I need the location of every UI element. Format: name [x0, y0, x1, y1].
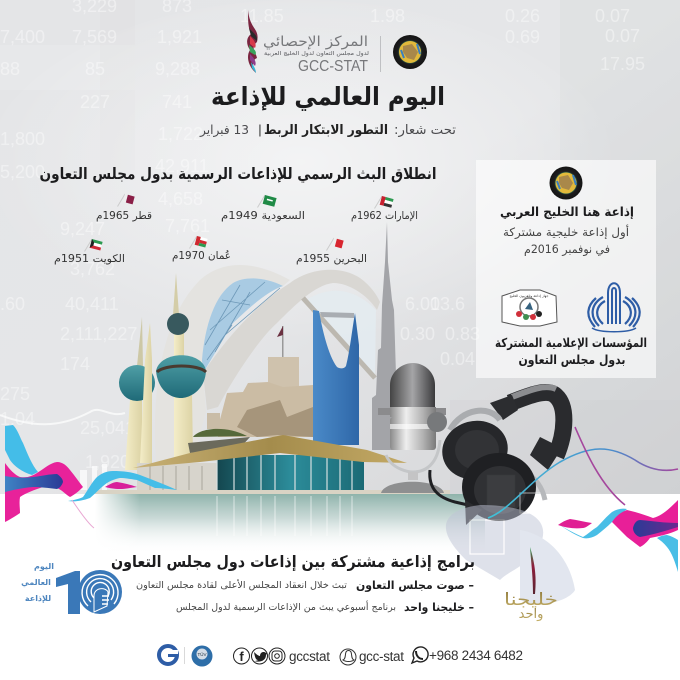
icon: UAE flag [375, 195, 394, 213]
background: market data screen: 0.69 [505, 27, 540, 47]
background: market data screen: 13.6 [430, 294, 465, 314]
icon: Kuwait flag [85, 238, 103, 255]
background: market data screen: 3,762 [70, 259, 115, 279]
icon: Twitter [252, 648, 268, 664]
logo: Our Gulf is one calligraphy [504, 547, 558, 622]
ribbon: left wave [5, 425, 177, 528]
background: market data screen: 0.07 [605, 26, 640, 46]
programme: Our Gulf is one [176, 600, 474, 615]
logo: Our Gulf is one calligraphy: واحد [519, 607, 543, 622]
text: GCC-STAT: GCC-STAT [298, 58, 368, 75]
footer: logos and contact [159, 646, 523, 666]
background: market data screen: 0.04 [440, 349, 475, 369]
heading: joint programmes: برامج إذاعية مشتركة بين إذاعات دول مجلس التعاون [111, 552, 475, 571]
icon: Oman flag [190, 235, 208, 252]
logo: Gulf joint media production [588, 283, 640, 332]
headphones reflection [446, 493, 575, 604]
background: market data screen: 88 [0, 59, 20, 79]
subtitle: slogan and date: ‏تحت شعار:‏ [394, 123, 456, 138]
icon: Bahrain flag [327, 237, 344, 254]
Omani fort [193, 357, 313, 437]
icon: Facebook [234, 648, 250, 664]
icon: Snapchat [340, 649, 356, 665]
icon: Facebook: f [239, 649, 244, 664]
background: market data screen: 5,200 [0, 162, 45, 182]
pavilion building [95, 435, 450, 495]
icon: GCC emblem [550, 166, 582, 200]
background: market data screen: 0.26 [505, 6, 540, 26]
background: market data screen: 1,04 [0, 409, 35, 429]
background: market data screen: 17.95 [600, 54, 645, 74]
background: market data screen [0, 0, 680, 494]
text: of GCC countries: بدول مجلس التعاون [518, 352, 626, 367]
background: market data screen: 0.83 [445, 324, 480, 344]
subtitle: slogan and date: التطور الابتكار الربط [264, 123, 388, 138]
label: Qatar 1965 [96, 193, 152, 222]
icon: GCC emblem [393, 35, 427, 69]
icon: WhatsApp [412, 647, 428, 663]
label: Qatar 1965: قطر 1965م [96, 210, 152, 222]
microphone [378, 363, 447, 493]
heading: launch of official radio broadcast: انطلاق البث الرسمي للإذاعات الرسمية بدول مجلس التعاون [40, 165, 436, 184]
logo: Gulf radio and TV authority: جهاز إذاعة وتلفزيون الخليج [510, 294, 548, 299]
programme: Voice of the GCC [136, 578, 474, 593]
Kingdom Centre [313, 310, 359, 445]
background: market data screen: .60 [0, 294, 25, 314]
illustration: landmarks [95, 222, 575, 604]
background: market data screen: 0.07 [595, 6, 630, 26]
text: first joint radio: أول إذاعة خليجية مشتركة [503, 224, 629, 240]
background: market data screen: 275 [0, 384, 30, 404]
background: market data screen: 227 [80, 92, 110, 112]
programme: Voice of the GCC: ‏– صوت مجلس التعاون [356, 578, 474, 593]
text: joint media institutions: المؤسسات الإعلامية المشتركة [495, 335, 647, 350]
arches [155, 265, 380, 470]
icon: TUV badge [192, 646, 212, 666]
programme: Our Gulf is one: ‏– خليجنا واحد [404, 600, 474, 615]
subtitle: slogan and date: ‏13 فبراير [199, 122, 249, 138]
background: market data screen: 0.30 [400, 324, 435, 344]
text: gcc-stat: gcc-stat [359, 649, 404, 664]
programme: Our Gulf is one: برنامج أسبوعي يبث من الإذاعات الرسمية لدول المجلس [176, 600, 396, 613]
background: market data screen: 1,800 [0, 129, 45, 149]
background: market data screen: 9,247 [60, 219, 105, 239]
label: UAE 1962: الإمارات 1962م [351, 210, 418, 222]
programme: Voice of the GCC: تبث خلال انعقاد المجلس الأعلى لقادة مجلس التعاون [136, 579, 347, 591]
logo: World Radio Day 10: العالمي [21, 578, 51, 587]
panel: Gulf radio and joint institutions [476, 160, 656, 378]
logo: World Radio Day 10: للإذاعة [25, 594, 51, 603]
background: market data screen: 1.98 [370, 6, 405, 26]
wave lines [488, 427, 678, 518]
logo: World Radio Day 10: اليوم [34, 562, 54, 571]
icon: TUV badge: TÜV [198, 651, 206, 657]
text: centre name: المركز الإحصائي [263, 34, 368, 50]
background: market data screen: 4,658 [158, 189, 203, 209]
text: centre subtitle: لدول مجلس التعاون لدول الخليج العربية [264, 51, 369, 57]
background: market data screen: 6.00 [405, 294, 440, 314]
text: gccstat: gccstat [289, 649, 330, 664]
subtitle: slogan and date [199, 122, 456, 138]
background: market data screen: 1,921 [157, 27, 202, 47]
background: market data screen: 1,722 [158, 124, 203, 144]
label: Kuwait 1951 [54, 238, 125, 265]
icon: Instagram [269, 648, 285, 664]
flagpole and fort flag [277, 326, 284, 362]
background: market data screen: 25,041 [80, 418, 135, 438]
label: Kuwait 1951: الكويت 1951م [54, 253, 125, 265]
background: market data screen: 42,911 [155, 156, 209, 176]
label: Oman 1970 [172, 235, 231, 262]
icon: Ministry badge [159, 646, 178, 664]
label: Saudi Arabia 1949: السعودية 1949م [221, 210, 305, 222]
label: Bahrain 1955 [296, 237, 367, 265]
label: Saudi Arabia 1949 [221, 194, 305, 222]
text: Hona Al-Khaleej radio: إذاعة هنا الخليج العربي [500, 204, 634, 219]
background: market data screen: 1,920 [85, 452, 130, 472]
Burj Khalifa [372, 222, 396, 450]
label: Oman 1970: عُمان 1970م [172, 250, 231, 262]
icon: Saudi flag [258, 194, 277, 212]
icon: Qatar flag [118, 193, 135, 210]
water reflection [95, 494, 485, 554]
background: market data screen: 7,761 [165, 216, 210, 236]
background: market data screen: 741 [162, 92, 192, 112]
logo: GCC-STAT [247, 10, 427, 75]
logo: Our Gulf is one calligraphy: خليجنا [504, 590, 558, 610]
headphones [430, 387, 564, 525]
logo: Gulf radio and TV authority [502, 290, 557, 326]
label: Bahrain 1955: البحرين 1955م [296, 253, 367, 265]
subtitle: slogan and date: | [258, 122, 262, 137]
background: market data screen: 9,288 [155, 59, 200, 79]
background: market data screen: 40,411 [65, 294, 119, 314]
ribbon: right wave [558, 500, 678, 572]
logo: World Radio Day 10 [21, 562, 122, 614]
title: اليوم العالمي للإذاعة [211, 82, 445, 112]
background: market data screen: 85 [85, 59, 105, 79]
background: market data screen: 174 [60, 354, 90, 374]
icon: ribbon mark [247, 10, 258, 73]
background: market data screen: 7,400 [0, 27, 45, 47]
text: phone number: +968 2434 6482 [429, 648, 523, 663]
divider [380, 36, 381, 72]
background: market data screen: 7,569 [72, 27, 117, 47]
text: November 2016: في نوفمبر 2016م [524, 242, 610, 257]
background: market data screen: 11.85 [240, 6, 284, 26]
Kuwait towers [119, 273, 206, 470]
background: market data screen: 2,111,227 [60, 324, 137, 344]
label: UAE 1962 [351, 195, 418, 222]
